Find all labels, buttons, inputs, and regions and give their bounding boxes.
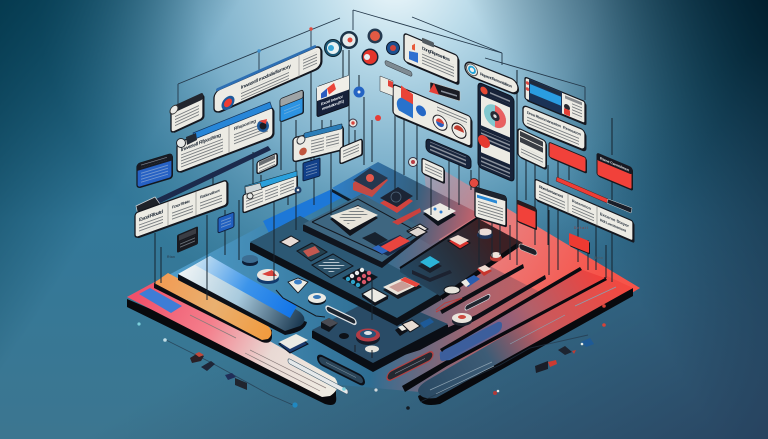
card: blue stripe note bbox=[475, 187, 507, 228]
card: reporting bbox=[177, 106, 274, 174]
shape: pentagon chip bbox=[288, 278, 308, 293]
shape: red white blue disc bbox=[257, 269, 279, 284]
object: white diamond bbox=[362, 280, 388, 320]
card: big donut and circles bbox=[393, 82, 472, 149]
line trace beside pill bbox=[276, 290, 325, 317]
card: icon note with tab bbox=[293, 123, 344, 163]
shape: sushi disc bbox=[452, 313, 472, 326]
card: document with icons bbox=[404, 30, 460, 86]
shape: white and navy pad bbox=[279, 334, 308, 353]
card: gray and blue tag bbox=[280, 89, 304, 123]
shape: dark outlined pill bbox=[318, 354, 364, 386]
card: three column lower right: Rotemnon bbox=[572, 198, 592, 211]
small label at right: Rehn bbox=[594, 256, 603, 260]
card: excel three column: Fcxor Rlnkts bbox=[172, 198, 191, 210]
object: white text tile bbox=[330, 205, 378, 236]
card: red icon dark note bbox=[317, 75, 349, 117]
card: red with dark head bbox=[597, 153, 633, 191]
header: red swatches above big card bbox=[380, 76, 393, 96]
card: small note bbox=[422, 158, 445, 184]
strip: orange bbox=[154, 273, 272, 343]
plate: top bbox=[332, 162, 480, 245]
card: red icon dark note: Excel Interior bbox=[321, 94, 343, 107]
card: navy text bbox=[426, 138, 471, 170]
card: small top left bbox=[170, 92, 204, 135]
shape: blue rounded bar end bbox=[440, 320, 502, 363]
shape: white long bar bbox=[288, 358, 348, 395]
card: red small bbox=[517, 200, 537, 230]
shape: dark cube bbox=[321, 318, 338, 332]
small label at left: Rtan bbox=[167, 255, 175, 259]
object: dark stack bbox=[380, 187, 421, 225]
shape: navy pad bbox=[242, 255, 258, 266]
right strip dark divider bbox=[402, 277, 607, 392]
card: excel three column: Rationalises bbox=[200, 187, 221, 200]
card: navy grid bbox=[303, 158, 320, 181]
card: small center note bbox=[340, 138, 363, 165]
shape: pill with red outline bbox=[387, 350, 433, 382]
card: modal summary bbox=[214, 42, 322, 116]
right strip outer bbox=[418, 276, 633, 405]
card: document with icons: Dong Rkpresentions bbox=[422, 46, 450, 62]
card: long text: Drea Rlemmaneaton bbox=[527, 110, 562, 129]
card: excel three column: Excel Rfoutd bbox=[139, 209, 163, 223]
object: small keys bbox=[362, 224, 428, 246]
red tab bar bbox=[556, 177, 632, 213]
shape: target disc bbox=[356, 328, 380, 345]
tab with blue stripe bbox=[245, 171, 297, 199]
card: long text: Remeaion bbox=[563, 125, 582, 137]
card: red with dark head: Rame Cannolmen bbox=[600, 156, 630, 173]
plate: lower controls bbox=[312, 295, 448, 372]
card: dark label bbox=[177, 226, 198, 253]
plate: center bbox=[303, 194, 426, 268]
card: modal summary: Inwasell modalisfismory bbox=[241, 63, 291, 91]
card: long text bbox=[523, 105, 586, 153]
icon: red dot on note bbox=[470, 178, 478, 188]
card: dashboard with navy panel bbox=[525, 77, 586, 126]
card: blue note bbox=[137, 153, 173, 189]
card: red note bbox=[549, 142, 587, 174]
card: excel three column bbox=[135, 179, 228, 240]
card: reporting: Rfoponing bbox=[234, 118, 256, 131]
card: red icon dark note: resolution (01) bbox=[322, 98, 345, 111]
label: warning tag bbox=[429, 82, 460, 101]
circular icons bbox=[294, 28, 418, 194]
card: blue tag bbox=[218, 212, 234, 233]
object: glowing dark chip bbox=[353, 168, 388, 197]
object: cyan cube bbox=[412, 256, 452, 282]
shape: outlined pill bbox=[326, 305, 356, 325]
right strip middle bbox=[440, 267, 605, 360]
card: compact dark head bbox=[257, 153, 278, 175]
shape: small chips bbox=[339, 318, 434, 358]
shape: red outlined trace and pill bbox=[436, 294, 490, 312]
strip: light and blue bbox=[178, 256, 307, 335]
card: red tag bbox=[569, 233, 590, 254]
panel: tall dark with donut bbox=[478, 82, 514, 182]
pill: grey gauge tag bbox=[385, 60, 412, 77]
connector lines at top bbox=[178, 10, 585, 108]
chip: dark tag bbox=[519, 243, 537, 256]
blue tab bar bbox=[176, 102, 272, 148]
icon: reporting badge bbox=[257, 119, 269, 132]
pill: title with cyan ring: Reprent Remonistiaon bbox=[480, 71, 512, 89]
object: red stripe tile bbox=[372, 235, 411, 256]
card: three column lower right: Rbenbresament bbox=[539, 184, 564, 199]
floor platform bbox=[127, 158, 640, 392]
vertical drop wires bbox=[155, 50, 612, 300]
card: lower tab pair bbox=[243, 174, 298, 214]
scattered right components bbox=[342, 304, 606, 410]
scattered left components bbox=[137, 322, 298, 408]
card: three column lower right bbox=[535, 179, 634, 243]
object: white red tiles bbox=[408, 227, 502, 294]
card: dark head note bbox=[518, 128, 547, 171]
object: button grid bbox=[342, 268, 378, 289]
pill: title with cyan ring bbox=[465, 60, 519, 97]
card: three column lower right: Excerse Stayor bbox=[600, 211, 629, 229]
panel tiles on grid plate bbox=[280, 236, 353, 278]
shape: blue white disc bbox=[308, 293, 326, 305]
plate: grid bbox=[250, 216, 441, 326]
plate: right bbox=[400, 218, 524, 314]
small label near red tag: Detail bbox=[574, 226, 588, 230]
right strip inner line bbox=[374, 275, 546, 364]
object: white blue tile bbox=[423, 203, 456, 226]
object: white card with red banner bbox=[383, 277, 422, 299]
card: reporting: Inwesell Rfposhing bbox=[181, 132, 221, 153]
dark connector bar bbox=[136, 146, 271, 215]
card: three column lower right: Rdt Lonstrament bbox=[600, 218, 627, 233]
strip: red to white bbox=[127, 279, 338, 405]
